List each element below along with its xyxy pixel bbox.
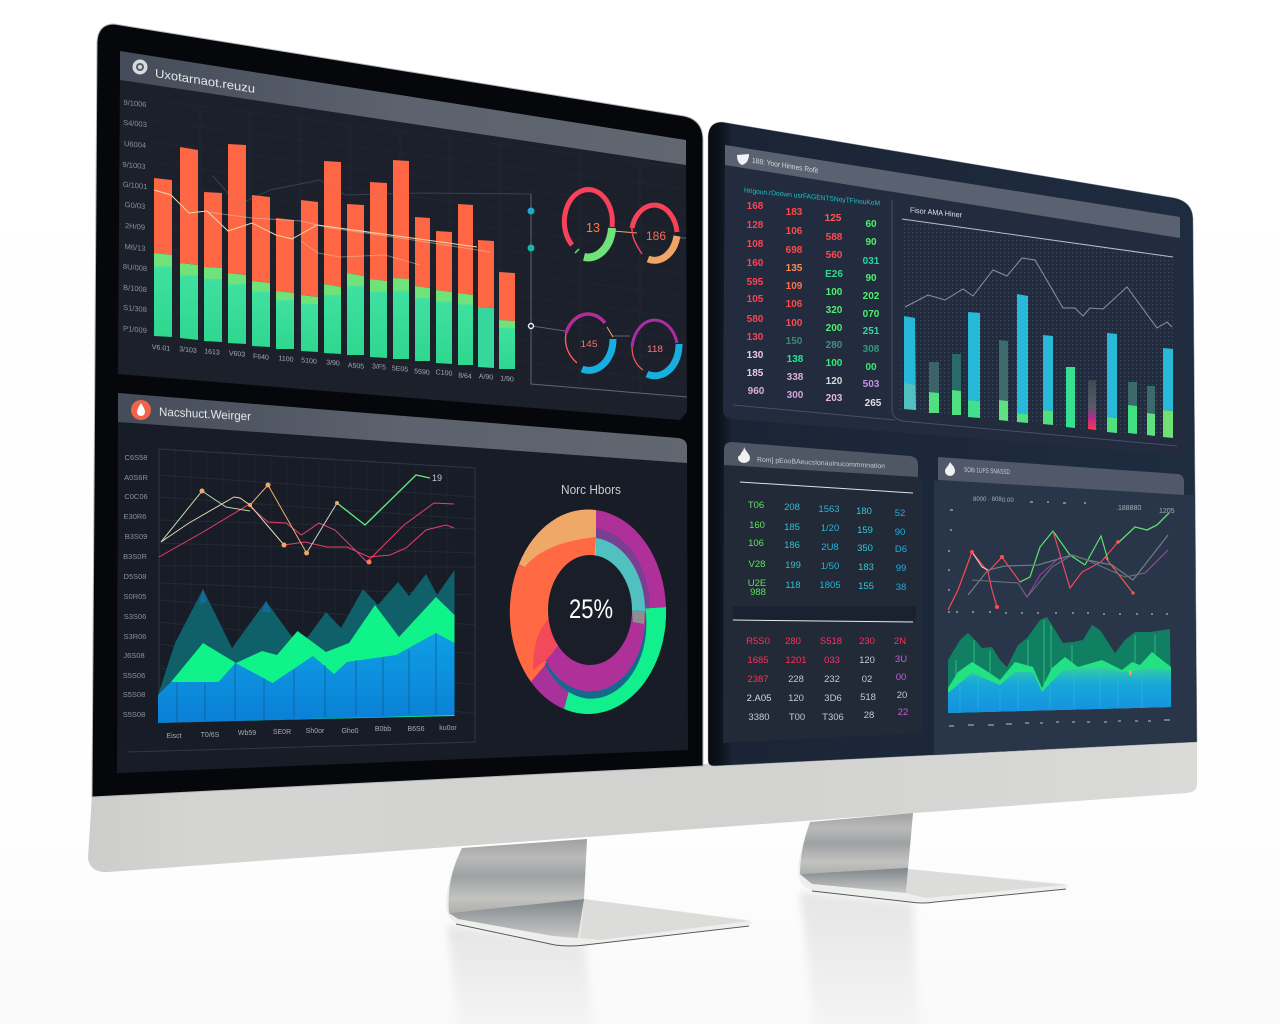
right monitor: [708, 122, 1197, 766]
area chart: stacked teal, green, blue: [158, 570, 454, 723]
table: column 1: 130: [747, 332, 764, 343]
top chart labels: .188880: [1116, 505, 1141, 512]
lower table: 20: [897, 690, 907, 701]
upper table: 118: [785, 580, 801, 591]
chart top rule: [902, 219, 1173, 257]
x axis labels: V6.01: [152, 344, 170, 353]
panel title: Rom] pEooBAeucsIonauInucommmnation: [757, 457, 885, 470]
table: column 3: 560: [826, 250, 843, 261]
x axis labels: 3/F5: [372, 363, 386, 372]
left monitor bezel: [92, 24, 703, 797]
x axis labels: V603: [229, 350, 245, 359]
x axis labels: 1100: [278, 355, 294, 364]
icon: flame: [738, 447, 750, 463]
chart title: Fisor AMA Hiner: [910, 205, 962, 220]
table: column 3: 125: [825, 213, 842, 224]
divider band: [733, 606, 916, 620]
x axis labels: 5100: [301, 357, 317, 366]
table: column 2: 138: [787, 354, 804, 365]
panel: area chart and donut: [117, 393, 688, 773]
icon: drop: [131, 400, 151, 420]
upper table: 2U8: [821, 542, 839, 553]
silver monitor chin: [88, 738, 1197, 872]
upper table: 52: [895, 508, 905, 519]
y axis labels: B3S09: [125, 532, 147, 541]
table: column 3: 320: [826, 305, 843, 316]
panel body: [118, 80, 687, 420]
upper table: 99: [896, 563, 906, 574]
x axis labels: SE0R: [273, 729, 291, 736]
icon: flame: [945, 462, 955, 476]
y axis labels: 2H/09: [125, 221, 145, 232]
x axis labels: F640: [253, 353, 269, 362]
upper table: 1563: [818, 504, 840, 515]
table: column 4: 503: [863, 379, 880, 390]
upper table: 1/20: [821, 523, 839, 534]
line chart: pink and green series: [159, 473, 454, 564]
table: column 4: 251: [863, 326, 880, 337]
y axis labels: S0R05: [124, 592, 146, 601]
table: column 1: 160: [747, 258, 764, 269]
left monitor: [92, 24, 703, 797]
table: column 1: 105: [747, 294, 764, 305]
icon: globe: [132, 60, 148, 74]
chart frame and grid: [127, 449, 475, 752]
upper table: 185: [784, 522, 800, 533]
upper table: 1805: [819, 580, 841, 591]
panel title: 188: Yoor Hinnes Rofit: [752, 156, 819, 175]
lower table: 2N: [894, 636, 906, 647]
x axis ticks: [949, 720, 1170, 726]
lower table: 00: [896, 672, 906, 683]
lower table: 2387: [747, 674, 769, 685]
table: column 3: 100: [826, 358, 843, 369]
panel header: [120, 51, 686, 165]
lower table: 22: [898, 707, 908, 718]
x axis labels: A/90: [479, 373, 493, 382]
table: column 4: 070: [863, 309, 880, 320]
ring gauge: 186: [632, 205, 677, 260]
panel: numeric tables: [723, 442, 922, 743]
table: column 4: 265: [865, 398, 882, 409]
lower table: 033: [824, 655, 840, 666]
ring gauge: 118: 118: [647, 344, 663, 355]
lower table: 120: [788, 693, 804, 704]
ring gauge: 145: 145: [580, 339, 598, 350]
bar chart: blue and green columns: [904, 294, 1173, 438]
line overlay: [905, 258, 1172, 328]
y axis labels: S5S08: [123, 690, 145, 699]
right monitor bezel: [708, 122, 1197, 766]
upper table: 1/50: [821, 561, 839, 572]
table: column 2: 100: [786, 318, 803, 329]
upper table: T06: [748, 500, 764, 511]
x axis labels: 5590: [414, 368, 430, 377]
ring gauge: 118: [632, 320, 679, 376]
upper table: 180: [856, 506, 872, 517]
lower table: 3380: [748, 712, 770, 723]
top chart labels: 1205: [1159, 508, 1175, 515]
table frame: [733, 200, 1177, 446]
y axis labels: D5S08: [124, 572, 146, 581]
table: column 1: 108: [747, 239, 764, 250]
table: column 1: 580: [747, 314, 764, 325]
y axis labels: [123, 98, 147, 335]
y axis labels: J6S08: [123, 651, 145, 660]
table heading: Hrigoun.rDoown usrFAGENTSNoyTFinouKoM: [744, 187, 880, 208]
dotted chart background: [900, 220, 1173, 438]
top chart labels: [973, 497, 1175, 515]
lower table: 518: [860, 692, 876, 703]
table: column 3: 200: [826, 323, 843, 334]
upper table: 183: [858, 562, 874, 573]
y axis labels: P1/009: [123, 324, 147, 335]
y axis labels: C6S58: [125, 453, 147, 462]
ring gauge: 13: 13: [586, 220, 600, 235]
table: column 1: [747, 201, 765, 397]
connector frame and dots: [528, 194, 687, 397]
x axis labels: Eisct: [166, 733, 182, 740]
panel body: [117, 420, 688, 773]
table: column 3: 203: [826, 393, 843, 404]
x axis labels: B6S6: [407, 726, 425, 733]
x axis labels: [166, 725, 457, 740]
panel title: SOtb 1UFS SNASSD: [964, 467, 1010, 476]
table: column 3: 100: [826, 287, 843, 298]
lower table: 230: [859, 636, 875, 647]
upper table: 988: [750, 587, 766, 598]
lower table: T306: [822, 712, 844, 723]
table: column 3: 588: [826, 232, 843, 243]
y axis labels: S5S08: [123, 710, 145, 719]
table: column 3: E26: [825, 269, 843, 280]
ring gauge: 145: [565, 314, 613, 370]
panel header: [118, 393, 687, 463]
lower table: 232: [824, 674, 840, 685]
lower table: [746, 636, 908, 723]
table: column 2: [786, 207, 804, 401]
upper table: 38: [896, 582, 906, 593]
y axis labels: S5S06: [123, 671, 145, 680]
y axis labels: [123, 453, 148, 719]
upper table: 159: [857, 525, 873, 536]
table: column 2: 109: [786, 281, 803, 292]
y axis labels: 9/1003: [123, 160, 145, 171]
lower table: 02: [862, 674, 872, 685]
grid lines: [153, 100, 686, 400]
lower rule: [733, 620, 913, 622]
table: column 4: 90: [865, 273, 877, 284]
lower table: 2.A05: [747, 693, 771, 704]
donut chart: 25%: [510, 509, 666, 714]
x axis labels: Wb59: [238, 730, 256, 737]
table: column 4: 60: [865, 219, 877, 230]
lower table: R5S0: [746, 636, 770, 647]
upper table: 90: [895, 527, 905, 538]
x axis labels: [152, 344, 514, 384]
ring gauge: 13: [564, 190, 612, 257]
lower table: T00: [789, 712, 805, 723]
lower table: 3D6: [824, 693, 842, 704]
y axis labels: A0S6R: [124, 473, 148, 482]
upper table: 199: [785, 560, 801, 571]
y axis labels: G/1001: [123, 180, 147, 191]
upper table: 155: [858, 581, 874, 592]
upper table: U2E: [748, 578, 766, 589]
table: column 2: 183: [786, 207, 803, 218]
table: column 2: 106: [786, 299, 803, 310]
upper table: 160: [749, 520, 765, 531]
lower table: 120: [859, 655, 875, 666]
table: column 3: 280: [826, 340, 843, 351]
line chart: pink and green series: 19: [432, 473, 442, 483]
panel title: Nacshuct.Weirger: [159, 405, 251, 423]
stand reflections: [447, 892, 918, 1024]
table: column 2: 150: [786, 336, 803, 347]
table: column 4: 202: [863, 291, 880, 302]
upper rule: [740, 482, 913, 493]
x axis labels: 5E05: [392, 365, 408, 374]
table: column 4: 00: [865, 362, 877, 373]
tick dots: [948, 502, 1168, 614]
lower table: 1685: [747, 655, 769, 666]
table: column 4: 031: [863, 256, 880, 267]
table: column 2: 135: [786, 263, 803, 274]
x axis labels: 1613: [204, 348, 220, 357]
y axis labels: G0/03: [125, 200, 145, 211]
upper table: D6: [895, 544, 907, 555]
y axis labels: C0C06: [124, 492, 148, 501]
table: column 1: 595: [747, 277, 764, 288]
y axis labels: S3R06: [124, 632, 146, 641]
table: column 1: 960: [748, 386, 765, 397]
table: column 2: 338: [787, 372, 804, 383]
bar chart: orange and green stacked bars: [154, 144, 515, 369]
panel body: [723, 160, 1185, 455]
line overlay on bars: [154, 176, 531, 265]
y axis labels: S4/003: [123, 118, 147, 129]
top chart labels: 0.00: [1002, 498, 1014, 504]
panel body: [723, 465, 922, 743]
upper table: V28: [749, 559, 765, 570]
table: column 4: 90: [865, 237, 877, 248]
table: column 1: 185: [747, 368, 764, 379]
table: column 2: 698: [786, 245, 803, 256]
panel title: Uxotarnaot.reuzu: [155, 66, 255, 96]
lower table: 280: [785, 636, 801, 647]
panel header: [938, 457, 1184, 495]
x axis labels: Sh0or: [306, 728, 325, 735]
lower table: 28: [864, 710, 874, 721]
lower table: S518: [820, 636, 842, 647]
table: column 3: 120: [826, 376, 843, 387]
y axis labels: B/1008: [123, 283, 147, 294]
x axis labels: 8/64: [458, 372, 472, 381]
x axis labels: A505: [348, 362, 364, 371]
panel: table and dotted bar chart: [723, 145, 1185, 455]
upper table: 186: [784, 540, 800, 551]
area chart: [948, 617, 1171, 713]
top chart labels: 8000 · 808: [973, 497, 1002, 503]
lower table: 3U: [895, 654, 907, 665]
table: column 4: [863, 219, 882, 409]
y axis labels: E30R6: [124, 512, 146, 521]
table: column 1: 130: [747, 350, 764, 361]
table: column 4: 308: [863, 344, 880, 355]
ring gauge: 186: 186: [646, 229, 666, 243]
icon: shield: [737, 154, 749, 165]
upper table: 350: [857, 543, 873, 554]
donut value: 25%: [569, 594, 613, 624]
table: column 2: 300: [787, 390, 804, 401]
x axis labels: 3/103: [179, 346, 197, 355]
upper table: 208: [784, 502, 800, 513]
y axis labels: 8U/008: [123, 262, 147, 273]
x axis labels: C100: [436, 369, 452, 378]
upper table: [748, 500, 907, 598]
panel: bar chart and rings: [118, 51, 687, 420]
x axis labels: T0/6S: [201, 732, 220, 739]
panel body: [934, 480, 1196, 755]
panel: line and area charts: [934, 457, 1196, 755]
table: column 3: [825, 213, 843, 404]
lower table: 1201: [785, 655, 807, 666]
left monitor stand: [446, 839, 752, 946]
y axis labels: B3S0R: [123, 552, 147, 561]
x axis labels: 1/90: [500, 375, 514, 384]
x axis labels: Gho0: [341, 728, 359, 735]
table: column 1: 128: [747, 220, 764, 231]
x axis labels: ku0or: [439, 725, 457, 732]
table: column 2: 106: [786, 226, 803, 237]
y axis labels: U6004: [124, 139, 146, 150]
x axis labels: B0bb: [375, 726, 391, 733]
upper table: 106: [748, 538, 764, 549]
y axis labels: M6/13: [125, 242, 145, 253]
panel header: [725, 145, 1180, 238]
multi-series line chart: [948, 513, 1169, 610]
donut title: Norc Hbors: [561, 483, 621, 497]
y axis labels: S1/308: [123, 303, 147, 314]
y axis labels: S3S06: [124, 612, 146, 621]
lower table: 228: [788, 674, 804, 685]
y axis labels: 9/1006: [124, 98, 146, 109]
table: column 1: 168: [747, 201, 764, 212]
x axis labels: 3/90: [326, 359, 340, 368]
right monitor stand: [798, 813, 1068, 903]
panel header: [724, 442, 918, 477]
